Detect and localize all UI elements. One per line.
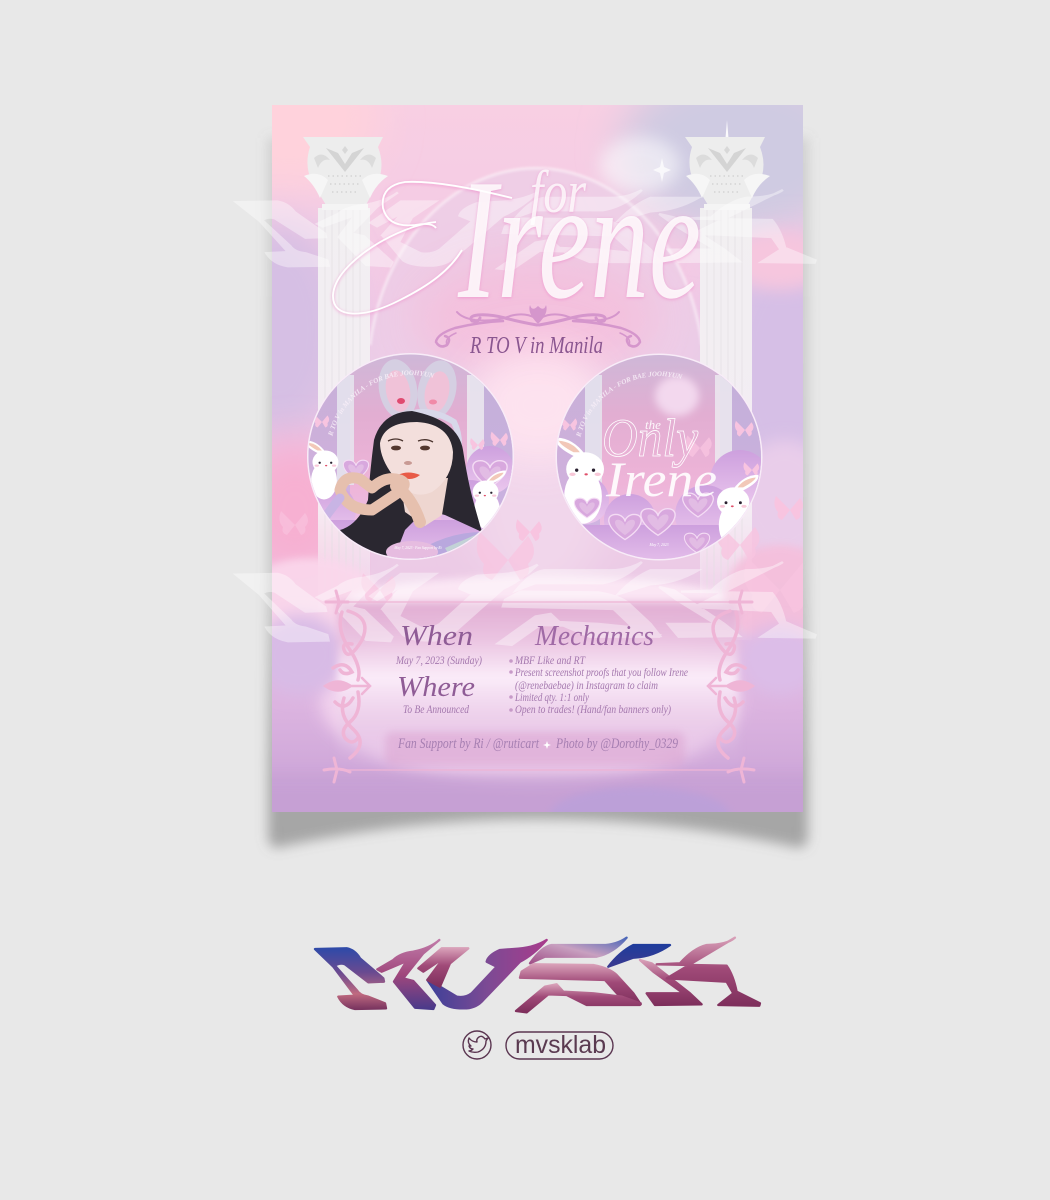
background colour washes: [200, 50, 870, 600]
face: [380, 422, 453, 495]
word: Irene: Irene: [457, 145, 701, 335]
fan small print: May 7, 2023: [648, 543, 669, 548]
mechanics list: Present screenshot proofs that you follow Irene: [514, 665, 689, 679]
neck: [400, 478, 448, 526]
credit band: [385, 732, 685, 766]
lips: [398, 472, 420, 479]
heading: Mechanics: Mechanics: [534, 620, 654, 652]
bottom panel: [324, 591, 754, 782]
left column: [303, 137, 388, 576]
fan title: Irene: [605, 451, 717, 507]
left round fan: photo side: [307, 353, 514, 560]
outfit: [415, 532, 479, 558]
mechanics list: [509, 653, 689, 716]
lower clouds: [272, 546, 803, 812]
subtitle: R TO V in Manila: [469, 333, 603, 359]
handle pill: mvsklab: [515, 1031, 606, 1059]
butterflies: [280, 496, 803, 601]
mechanics list: Limited qty. 1:1 only: [514, 690, 589, 704]
title: for Irene: [333, 145, 701, 335]
bottom panel fill: [335, 598, 742, 704]
panel frame ornaments: [324, 591, 754, 782]
poster background: [272, 105, 803, 812]
right round fan: the Only Irene: [556, 354, 762, 560]
infographic canvas: [234, 105, 814, 1060]
hair: [340, 411, 482, 556]
heading: Where: Where: [397, 671, 475, 703]
bunny ears headband: [378, 359, 462, 446]
fan clouds: [314, 446, 512, 556]
fan background: [305, 350, 515, 565]
bunnies: [309, 441, 338, 500]
sparkle stars: [654, 121, 728, 181]
arch: [370, 168, 702, 600]
date: May 7, 2023 (Sunday): [395, 653, 482, 667]
credits: [397, 736, 679, 752]
right column: [685, 137, 770, 640]
credits: Fan Support by Ri / @ruticart: [397, 736, 540, 752]
ornament: flourish under title: [436, 305, 640, 346]
word: for: for: [530, 159, 587, 225]
fan background: [555, 350, 765, 565]
poster: [272, 105, 803, 812]
mechanics list: Open to trades! (Hand/fan banners only): [515, 702, 671, 716]
hearts: [574, 498, 600, 518]
mechanics list: MBF Like and RT: [514, 653, 586, 667]
fan clouds: [563, 450, 761, 559]
credits: Photo by @Dorothy_0329: [555, 736, 679, 752]
poster drop shadow: [268, 138, 808, 848]
hands forming heart: [340, 478, 404, 510]
swash of the initial: [333, 182, 512, 314]
fan title: the: [645, 417, 661, 432]
top watermark logo: [236, 190, 815, 270]
mechanics list: (@renebaebae) in Instagram to claim: [515, 678, 658, 692]
icon: twitter bird in circle: [463, 1031, 491, 1059]
venue: To Be Announced: [403, 702, 470, 716]
fan title: [604, 418, 716, 496]
bunnies: [556, 438, 604, 524]
logo: MVSK chrome wordmark: [315, 938, 760, 1012]
fan small print: May 7, 2023 · Fan Support by Ri: [393, 546, 442, 551]
fan title: Only: [602, 408, 698, 468]
heading: When: When: [400, 620, 473, 652]
lower watermark logo: [236, 562, 815, 645]
fan arc text: R TO V in MANILA - FOR BAE JOOHYUN: [576, 371, 683, 438]
fan arc text: R TO V in MANILA - FOR BAE JOOHYUN: [328, 370, 435, 436]
